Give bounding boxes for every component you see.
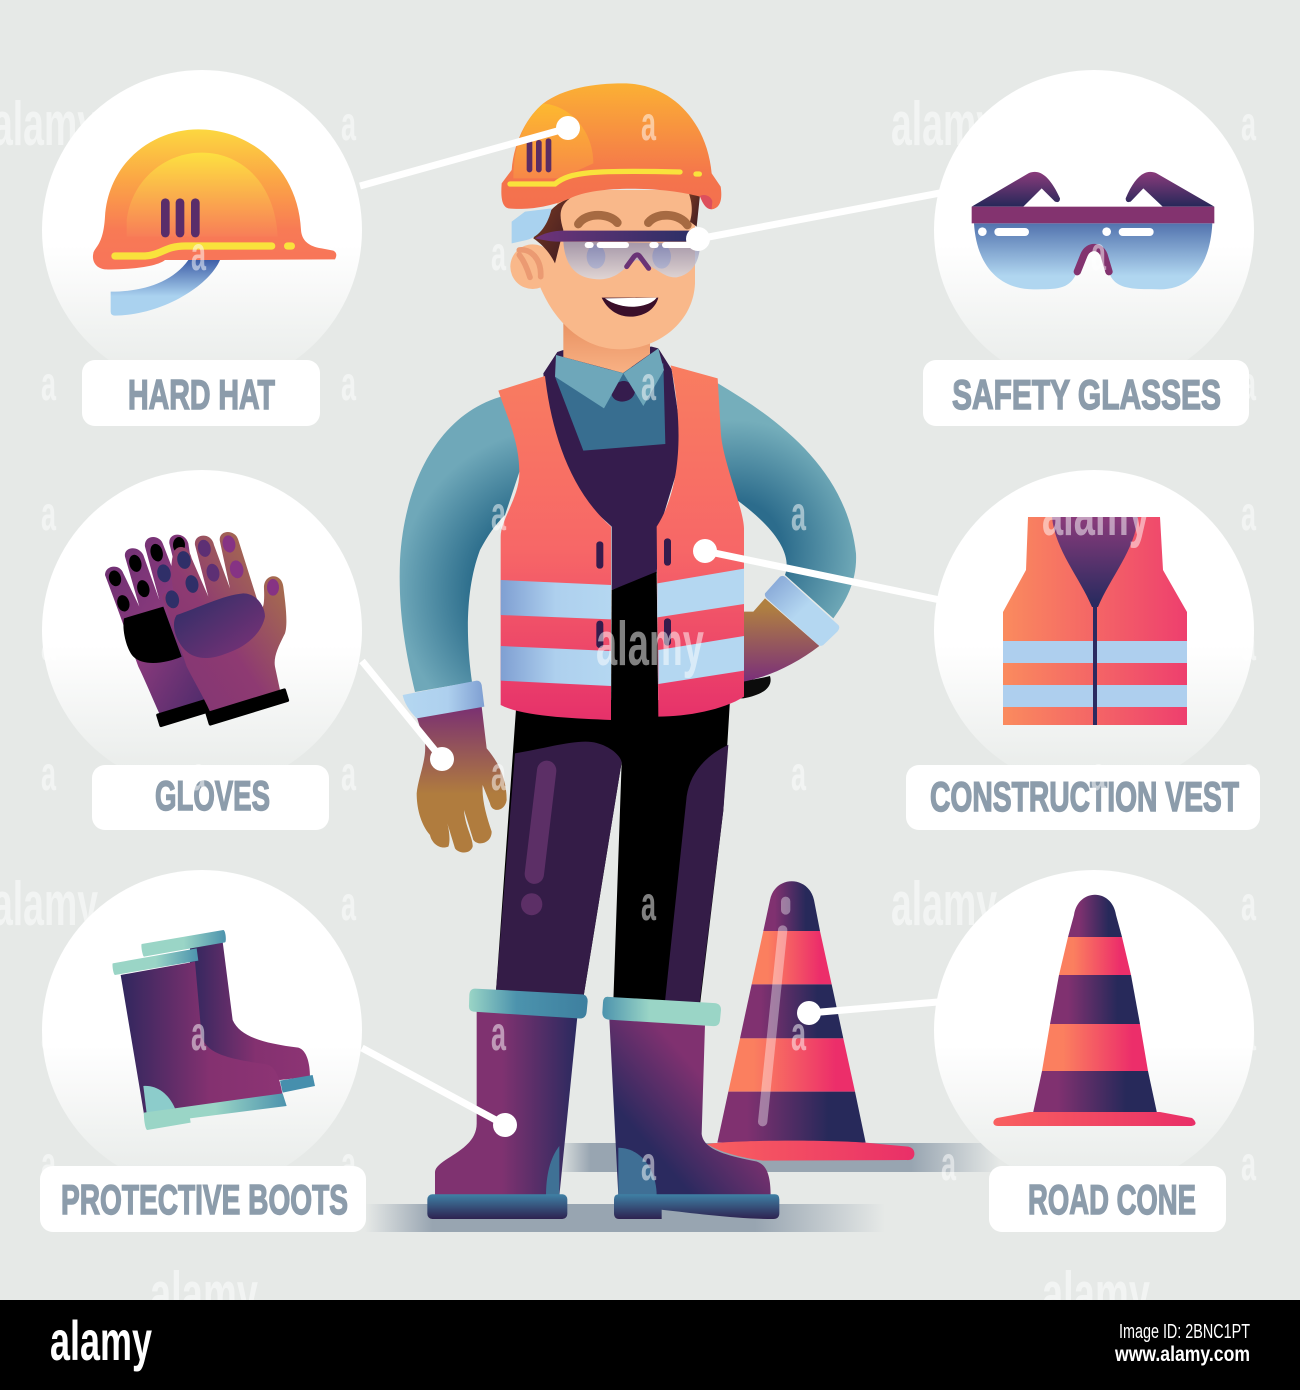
torso: shirt and vest (498, 347, 744, 720)
watermark pattern: a (491, 488, 506, 541)
icon: safety glasses (972, 172, 1214, 289)
watermark pattern: a (1241, 618, 1256, 671)
watermark pattern: a (1241, 1138, 1256, 1191)
left boot (427, 989, 588, 1219)
label: protective boots: PROTECTIVE BOOTS (61, 1176, 348, 1223)
head with helmet and glasses (501, 83, 721, 373)
trousers and boots (427, 700, 779, 1219)
panel: protective boots (40, 870, 366, 1232)
label: road cone (989, 1166, 1226, 1232)
pointer: construction vest (693, 539, 940, 600)
watermark pattern: a (1241, 878, 1256, 931)
label: safety glasses (923, 360, 1249, 426)
label: protective boots (40, 1166, 366, 1232)
watermark pattern: a (491, 1008, 506, 1061)
icon: hard hat (93, 129, 336, 316)
watermark pattern: a (1241, 488, 1256, 541)
ground shadows (365, 1143, 1000, 1232)
watermark pattern: a (341, 98, 356, 151)
watermark pattern: a (1241, 1008, 1256, 1061)
image id: Image ID: 2BNC1PT (1119, 1321, 1250, 1343)
watermark pattern: a (941, 1138, 956, 1191)
label: gloves: GLOVES (155, 772, 270, 819)
watermark pattern: a (41, 748, 56, 801)
worker figure (400, 83, 856, 1219)
icon: construction vest (1003, 517, 1187, 725)
pointer: road cone (797, 1001, 938, 1025)
label: road cone: ROAD CONE (1028, 1176, 1196, 1223)
large road cone (707, 881, 914, 1161)
watermark pattern: alamy (891, 90, 997, 159)
watermark pattern: a (341, 878, 356, 931)
watermark pattern: a (41, 488, 56, 541)
panel: hard hat (42, 70, 362, 426)
watermark pattern: a (641, 98, 656, 151)
watermark pattern: a (641, 358, 656, 411)
pointer: protective boots (362, 1048, 517, 1137)
watermark pattern: a (941, 358, 956, 411)
left glove and cuff (403, 681, 507, 852)
watermark pattern: a (1241, 98, 1256, 151)
watermark pattern: a (641, 1138, 656, 1191)
watermark pattern: a (641, 878, 656, 931)
footer bar (0, 1300, 1300, 1390)
pointer: safety glasses (686, 193, 940, 251)
footer logo: alamy (50, 1309, 152, 1372)
watermark pattern: a (1091, 228, 1106, 281)
panel: construction vest (906, 470, 1260, 830)
watermark pattern: alamy (1042, 480, 1150, 549)
label: hard hat (82, 360, 320, 426)
icon: protective boots (112, 930, 315, 1130)
watermark pattern: a (1241, 748, 1256, 801)
watermark pattern: a (491, 748, 506, 801)
icon: gloves (105, 532, 290, 727)
watermark pattern: alamy (891, 870, 997, 939)
watermark pattern: a (191, 748, 206, 801)
icon: road cone (993, 895, 1196, 1126)
right arm, glove and cuff (718, 383, 856, 698)
watermark pattern: a (341, 1138, 356, 1191)
panel: gloves (42, 470, 362, 830)
label: construction vest (906, 765, 1260, 830)
watermark pattern: a (341, 358, 356, 411)
label: gloves (92, 765, 329, 830)
panel: road cone (934, 870, 1254, 1232)
label: hard hat: HARD HAT (128, 371, 275, 418)
watermark pattern: a (491, 228, 506, 281)
watermark pattern: a (41, 1138, 56, 1191)
watermark pattern: a (791, 748, 806, 801)
pointer: gloves (362, 661, 454, 771)
website: www.alamy.com (1114, 1343, 1250, 1366)
watermark pattern: a (791, 488, 806, 541)
left arm (400, 392, 530, 692)
panel: safety glasses (923, 70, 1254, 426)
watermark pattern: a (41, 1008, 56, 1061)
watermark pattern: a (791, 1008, 806, 1061)
right boot (602, 997, 779, 1219)
watermark pattern: a (341, 748, 356, 801)
watermark pattern: a (1091, 748, 1106, 801)
watermark pattern: alamy (150, 1260, 258, 1329)
watermark pattern: a (191, 1008, 206, 1061)
watermark pattern: a (41, 358, 56, 411)
watermark pattern: a (191, 228, 206, 281)
pointer: hard hat (360, 116, 580, 186)
watermark pattern: alamy (1042, 1260, 1150, 1329)
watermark pattern: a (41, 618, 56, 671)
watermark pattern: alamy (596, 610, 704, 679)
watermark pattern: a (1241, 358, 1256, 411)
